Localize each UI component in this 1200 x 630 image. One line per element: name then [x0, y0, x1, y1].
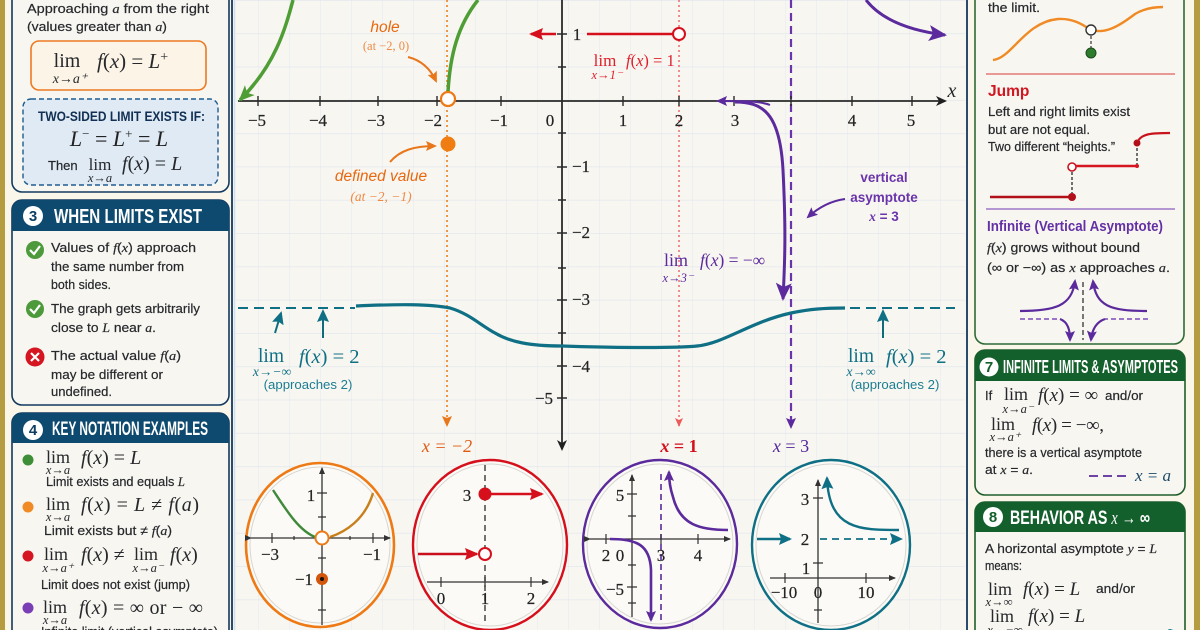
curve: green left branch — [240, 0, 293, 100]
x axis: 3 — [731, 111, 739, 130]
notation: limit not equal to value: x→a — [45, 510, 70, 524]
item: actual value may differ: The actual value f(a) — [51, 348, 181, 363]
label: left limit equals 1: lim — [594, 51, 616, 70]
notation: jump — [22, 544, 198, 592]
callout: two-sided limit: L — [112, 126, 125, 151]
red left limit segment — [531, 28, 685, 40]
inset: infinite discontinuity: 4 — [694, 546, 703, 565]
x axis: −1 — [490, 111, 508, 130]
x axis: x — [947, 80, 957, 102]
text: horizontal asymptote definition — [985, 541, 1157, 573]
formula: limit at plus infinity — [985, 579, 1136, 609]
inset: limit at infinity: 10 — [858, 583, 874, 602]
formula box: right-hand limit: x→a⁺ — [52, 72, 89, 87]
inset: infinite discontinuity: 0 — [616, 546, 624, 565]
item: arbitrarily close: The graph gets arbitrarily — [51, 301, 201, 316]
heading: when limits exist — [12, 200, 229, 231]
notation: infinite limit: lim — [43, 597, 67, 617]
x axis: −5 — [248, 111, 266, 130]
heading: infinite limits — [975, 350, 1185, 381]
heading: when limits exist: 3 — [29, 208, 37, 225]
label: vertical asymptote: vertical — [860, 170, 908, 185]
callout: two-sided limit: TWO-SIDED LIMIT EXISTS IF: — [38, 109, 205, 124]
label: limit as x to 3 from left: lim — [664, 250, 688, 270]
inset: removable discontinuity — [246, 463, 394, 627]
inset: jump discontinuity — [413, 460, 567, 630]
inset: limit at infinity — [752, 460, 910, 630]
teal arrows to asymptote — [275, 311, 883, 338]
notation: limit not equal to value: f(x) = L ≠ f(a) — [81, 494, 199, 516]
text: infinite description — [987, 240, 1170, 275]
label: limit at positive infinity: lim — [848, 346, 874, 367]
notation: infinite limit: f(x) = ∞ or − ∞ — [79, 597, 203, 619]
formula: vertical asymptote condition: If — [985, 388, 993, 403]
notation: infinite limit: x→a — [42, 613, 67, 627]
guide line: vertical asymptote x = 3: x = 3 — [772, 436, 809, 456]
x axis: −2 — [424, 111, 442, 130]
inset: infinite discontinuity: 2 — [602, 546, 610, 565]
curve: purple lower branch — [718, 101, 785, 299]
y axis: −1 — [572, 157, 590, 176]
label: limit at negative infinity — [252, 346, 360, 392]
right gold stripe — [1194, 0, 1200, 630]
curve: purple upper branch — [866, 0, 945, 35]
inset: infinite discontinuity: 5 — [616, 486, 624, 505]
panel: types of discontinuity — [975, 0, 1184, 344]
label: limit at negative infinity: lim — [258, 346, 284, 367]
y axis: −4 — [572, 357, 591, 376]
label: limit at negative infinity: (approaches 2) — [264, 377, 352, 392]
formula box: right-hand limit: f(x) = L — [97, 49, 160, 73]
item: arbitrarily close: close to L near a. — [51, 320, 156, 335]
callout: two-sided limit: x→a — [87, 171, 112, 185]
formula: limit at minus infinity: lim — [990, 606, 1014, 626]
label: limit at negative infinity: x→−∞ — [252, 364, 291, 379]
inset: removable discontinuity: 1 — [307, 486, 315, 505]
x axis: −3 — [367, 111, 385, 130]
label: limit as x to 3 from left — [662, 250, 765, 285]
label: hole — [363, 19, 436, 81]
callout: two-sided limit: + — [125, 126, 132, 141]
x axis: 4 — [848, 111, 857, 130]
callout: two-sided limit — [23, 99, 218, 185]
notation: limit not equal to value: Limit exists but ≠ f(a) — [44, 523, 172, 538]
item: same number from both sides: both sides. — [51, 277, 111, 292]
panel: key notation examples — [12, 413, 229, 630]
inset: removable discontinuity: −3 — [261, 545, 279, 564]
subheading: jump: Jump — [988, 83, 1029, 100]
panel: when limits exist — [12, 200, 229, 405]
inset: infinite discontinuity: −5 — [606, 580, 624, 599]
text: jump description: but are not equal. — [988, 122, 1090, 137]
formula: limit at minus infinity: f(x) = L — [1028, 606, 1085, 627]
inset: removable discontinuity: −1 — [363, 545, 381, 564]
label: left limit equals 1 — [591, 51, 675, 82]
x axis: −4 — [309, 111, 328, 130]
label: hole: (at −2, 0) — [363, 39, 409, 53]
x axis: 0 — [546, 111, 554, 130]
notation: limit exists — [22, 447, 185, 489]
notation: jump: f(x) ≠ — [81, 544, 125, 566]
defined value dot — [440, 136, 456, 152]
notation: infinite limit — [22, 597, 218, 630]
heading: infinite limits: 7 — [985, 359, 993, 376]
curve: green right branch — [448, 0, 478, 92]
notation: jump: lim — [134, 544, 158, 564]
inset: jump discontinuity: 2 — [527, 589, 535, 608]
notation: limit exists: f(x) = L — [81, 447, 141, 469]
item: same number from both sides — [26, 240, 196, 292]
heading: behavior as x to infinity — [975, 502, 1185, 532]
formula: limit at minus infinity — [986, 606, 1085, 630]
text: infinite description: f(x) grows without bound — [987, 240, 1140, 255]
label: limit as x to 3 from left: f(x) = −∞ — [700, 250, 765, 270]
inset: infinite discontinuity: 3 — [657, 546, 665, 565]
x axis — [238, 80, 957, 130]
label: limit at positive infinity: (approaches 2) — [851, 377, 939, 392]
text: approaching description — [27, 1, 209, 34]
label: left limit equals 1: x→1⁻ — [591, 68, 624, 82]
curve: teal asymptotic curve — [238, 305, 955, 348]
heading: behavior as x to infinity: 8 — [989, 509, 997, 526]
formula: limit at plus infinity: and/or — [1096, 581, 1136, 596]
formula: vertical asymptote condition: there is a vertical asymptote — [985, 445, 1142, 460]
inset: jump discontinuity: 1 — [481, 589, 489, 608]
y axis — [535, 0, 591, 449]
formula: limit at plus infinity: x→∞ — [985, 595, 1013, 609]
guide line: x = 1: x = 1 — [659, 436, 698, 456]
notation: limit exists: x→a — [45, 463, 70, 477]
formula: vertical asymptote condition: f(x) = ∞ — [1038, 385, 1098, 406]
y axis: 1 — [573, 25, 581, 44]
y axis: −5 — [535, 389, 553, 408]
label: limit at positive infinity — [845, 346, 947, 392]
text: jump description: Left and right limits exist — [988, 104, 1130, 119]
notation: limit exists: Limit exists and equals L — [46, 474, 185, 489]
item: actual value may differ: undefined. — [51, 384, 112, 399]
legend: asymptote line — [1089, 466, 1171, 485]
label: vertical asymptote: x = 3 — [868, 209, 899, 224]
item: actual value may differ — [26, 348, 181, 399]
notation: jump: x→a⁻ — [132, 561, 165, 575]
text: horizontal asymptote definition: A horizontal asymptote y = L — [985, 541, 1157, 556]
heading: behavior as x to infinity: BEHAVIOR AS x → ∞ — [1010, 508, 1150, 529]
item: arbitrarily close — [26, 300, 201, 335]
inset: infinite discontinuity — [583, 460, 737, 628]
panel: approaching from the right — [12, 0, 229, 192]
callout: two-sided limit: = — [89, 126, 113, 151]
panel: main graph — [232, 0, 967, 630]
formula: limit at plus infinity: f(x) = L — [1023, 579, 1080, 600]
inset: removable discontinuity: −1 — [295, 570, 313, 589]
item: same number from both sides: Values of f(x) approach — [51, 240, 196, 255]
left gold stripe — [0, 0, 5, 630]
formula box: right-hand limit: + — [160, 50, 168, 65]
notation: jump: x→a⁺ — [42, 561, 75, 575]
formula box: right-hand limit: lim — [54, 50, 81, 72]
callout: two-sided limit: = — [132, 126, 156, 151]
label: limit at negative infinity: f(x) = 2 — [299, 346, 360, 368]
heading: when limits exist: WHEN LIMITS EXIST — [54, 206, 202, 228]
formula: vertical asymptote condition: f(x) = −∞, — [1032, 415, 1104, 436]
inset: limit at infinity: 0 — [814, 583, 822, 602]
y axis: −2 — [572, 223, 590, 242]
label: defined value: (at −2, −1) — [350, 189, 412, 204]
inset: limit at infinity: 2 — [801, 530, 809, 549]
legend: asymptote line: x = a — [1134, 466, 1171, 485]
text: approaching description: Approaching a from the right — [27, 1, 209, 16]
formula: limit at plus infinity: lim — [988, 579, 1012, 599]
heading: key notation examples — [12, 413, 229, 443]
item: actual value may differ: may be different or — [51, 367, 164, 382]
x axis: 2 — [675, 111, 683, 130]
callout: two-sided limit: − — [82, 126, 89, 141]
text: removable ending: the limit. — [988, 0, 1040, 15]
diagram: jump discontinuity — [990, 133, 1170, 201]
notation: jump: Limit does not exist (jump) — [41, 577, 190, 592]
notation: jump: lim — [44, 544, 68, 564]
notation: limit exists: lim — [46, 447, 70, 467]
formula: vertical asymptote condition: and/or — [1105, 388, 1144, 403]
x axis: 5 — [907, 111, 915, 130]
text: approaching description: (values greater than a) — [27, 19, 167, 34]
subheading: infinite: Infinite (Vertical Asymptote) — [987, 218, 1163, 235]
diagram: removable discontinuity — [993, 7, 1163, 60]
y axis: −3 — [572, 290, 590, 309]
panel: behavior at infinity — [975, 502, 1185, 630]
inset: limit at infinity: −10 — [771, 583, 797, 602]
label: left limit equals 1: f(x) = 1 — [626, 51, 675, 70]
text: jump description: Two different “heights.” — [988, 139, 1115, 154]
inset: jump discontinuity: 3 — [463, 486, 471, 505]
item: same number from both sides: the same number from — [51, 259, 184, 274]
label: limit at positive infinity: f(x) = 2 — [886, 346, 947, 368]
label: vertical asymptote — [808, 170, 918, 224]
formula: vertical asymptote condition: x→a⁻ — [1002, 402, 1035, 416]
callout: two-sided limit: f(x) = L — [122, 153, 182, 175]
diagram: vertical asymptote — [1020, 281, 1148, 340]
guide line: x = -2: x = −2 — [421, 436, 472, 456]
label: defined value — [335, 146, 435, 204]
formula box: right-hand limit — [31, 41, 206, 90]
text: jump description — [988, 104, 1130, 154]
hole at -2,0 — [441, 92, 455, 106]
inset: limit at infinity: 1 — [802, 559, 810, 578]
inset: jump discontinuity: 0 — [437, 589, 445, 608]
formula: vertical asymptote condition — [985, 384, 1144, 477]
callout: two-sided limit: Then — [48, 158, 78, 173]
label: hole: hole — [370, 19, 400, 36]
text: horizontal asymptote definition: means: — [985, 558, 1022, 573]
text: infinite description: (∞ or −∞) as x approaches a. — [987, 260, 1170, 275]
label: limit at positive infinity: x→∞ — [845, 364, 876, 379]
formula: vertical asymptote condition: lim — [1004, 384, 1028, 404]
formula: vertical asymptote condition: x→a⁺ — [989, 430, 1022, 444]
formula: vertical asymptote condition: at x = a. — [985, 462, 1033, 477]
callout: two-sided limit: lim — [89, 155, 111, 174]
callout: two-sided limit: L — [69, 126, 82, 151]
heading: key notation examples: KEY NOTATION EXAMPLES — [52, 419, 208, 440]
callout: two-sided limit: L — [155, 126, 168, 151]
label: defined value: defined value — [335, 168, 427, 185]
x axis: 1 — [619, 111, 627, 130]
panel: infinite limits and asymptotes — [975, 350, 1185, 495]
notation: limit not equal to value — [22, 494, 199, 538]
label: vertical asymptote: asymptote — [850, 190, 918, 205]
label: limit as x to 3 from left: x→3⁻ — [662, 271, 695, 285]
formula: vertical asymptote condition: lim — [991, 414, 1015, 434]
notation: jump: f(x) — [170, 544, 198, 566]
inset: limit at infinity: 3 — [801, 490, 809, 509]
heading: key notation examples: 4 — [29, 422, 38, 439]
notation: limit not equal to value: lim — [46, 494, 70, 514]
